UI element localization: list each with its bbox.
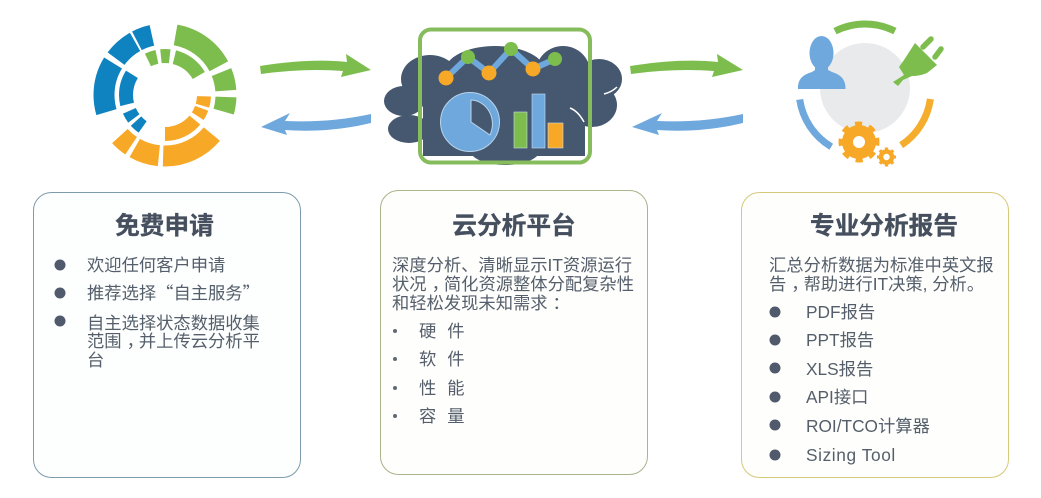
bullet list: XLS报告 <box>806 359 873 379</box>
description: 告 ，帮助进行IT决策, 分析。 <box>769 274 984 294</box>
bullet list: 欢迎任何客户申请 <box>87 255 225 275</box>
frame <box>420 30 590 162</box>
bullet list: 范围 ，并上传云分析平 <box>87 331 260 351</box>
icon: user <box>798 36 846 89</box>
bullet list <box>770 302 930 465</box>
description: 汇总分析数据为标准中英文报 <box>769 255 994 275</box>
heading: 免费申请 <box>115 212 214 240</box>
pie chart <box>440 92 500 152</box>
ring arcs <box>776 1 954 179</box>
bullet list: 硬 件 <box>419 321 465 341</box>
icon: segmented donut <box>104 34 226 156</box>
arrow: blue left 2 <box>632 113 743 135</box>
panel: professional report <box>742 192 1008 478</box>
panel: cloud analysis platform <box>380 190 648 474</box>
description: 和轻松发现未知需求 ： <box>392 293 570 313</box>
bullet list <box>393 321 465 426</box>
arrow: green right 1 <box>260 54 371 77</box>
description: 状况 ，简化资源整体分配复杂性 <box>392 274 634 294</box>
bullet list: 容 量 <box>419 406 465 426</box>
bullet list <box>54 255 260 370</box>
arrow: green right 2 <box>630 54 743 77</box>
heading: 专业分析报告 <box>810 212 958 240</box>
grey disc <box>820 43 910 133</box>
description: 深度分析、清晰显示IT资源运行 <box>392 255 632 275</box>
cloud <box>384 46 622 165</box>
icon: plug <box>893 39 941 86</box>
bullet list: 性 能 <box>419 378 465 398</box>
line chart <box>438 42 562 86</box>
bullet list: 台 <box>87 350 104 370</box>
bullet list: ROI/TCO计算器 <box>806 416 930 436</box>
icon: cloud analytics <box>384 30 622 165</box>
description <box>392 255 634 313</box>
description <box>769 255 994 294</box>
arrow: blue left 1 <box>261 113 371 135</box>
bullet list: Sizing Tool <box>806 445 896 465</box>
icon: services circle <box>776 1 954 179</box>
bullet list: PPT报告 <box>806 330 874 350</box>
bar chart <box>514 94 563 148</box>
icon: small gear <box>878 149 894 165</box>
bullet list: PDF报告 <box>806 302 875 322</box>
heading: 云分析平台 <box>452 211 576 240</box>
bullet list: API接口 <box>806 387 868 407</box>
bullet list: 推荐选择“自主服务” <box>87 279 260 304</box>
panel: free application <box>34 192 300 478</box>
bullet list: 自主选择状态数据收集 <box>87 313 260 333</box>
bullet list: 软 件 <box>419 349 465 369</box>
icon: large gear <box>841 124 877 160</box>
